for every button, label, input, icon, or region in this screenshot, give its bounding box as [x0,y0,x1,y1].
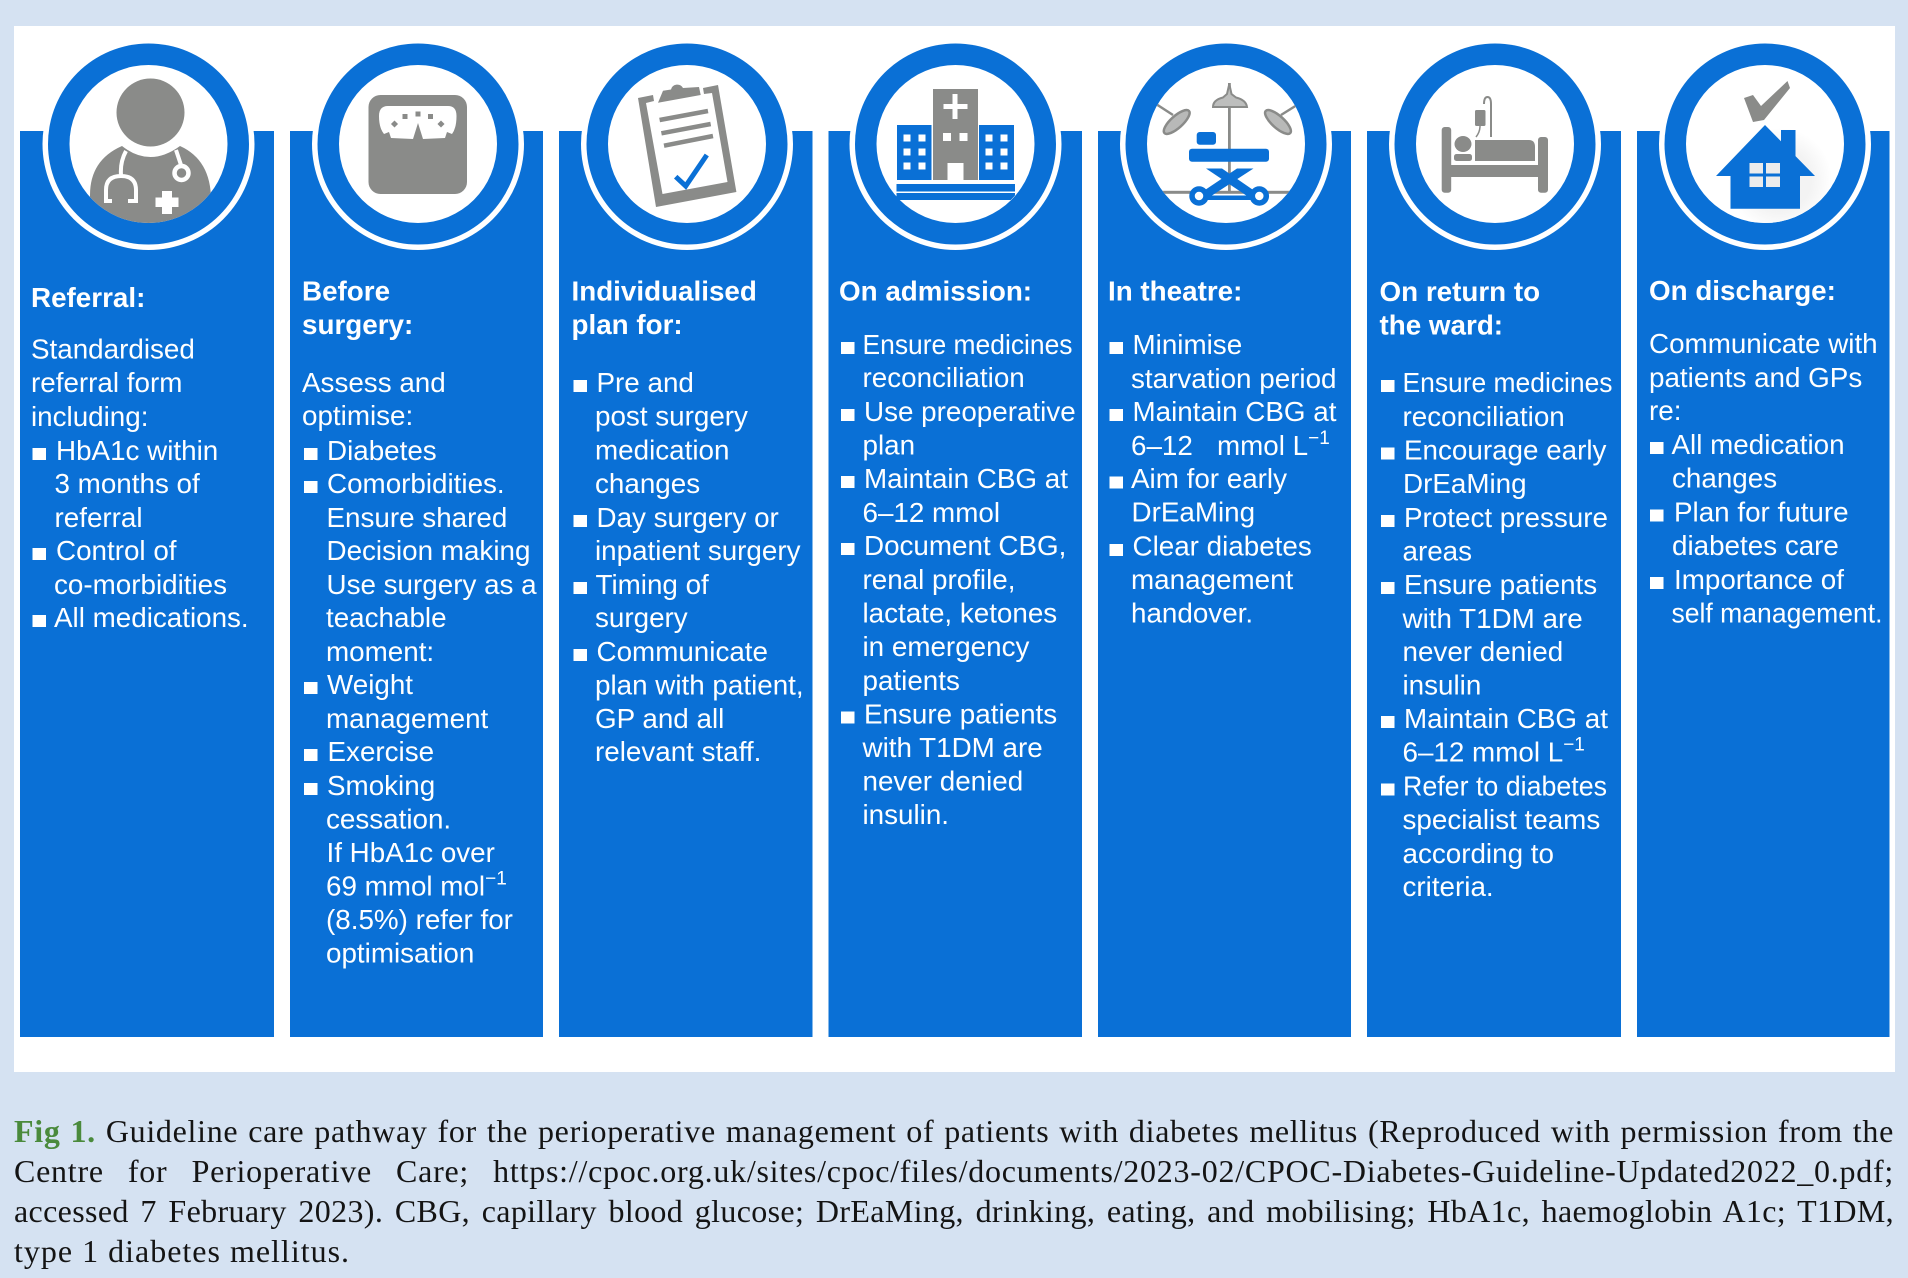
panel: referral [20,38,274,1037]
text block: Aim for early [1131,463,1287,494]
text block: 69 mmol mol [326,870,485,902]
text block: Ensure medicines [862,329,1072,360]
text block [302,367,537,968]
text block: −1 [1308,428,1330,449]
heading line 2: the ward: [1380,310,1503,340]
text block [841,329,1076,830]
text block: Importance of [1674,564,1844,595]
text block [31,334,249,633]
text block: Plan for future [1674,496,1849,528]
column background [1098,131,1351,1037]
panel: in theatre [1098,38,1351,1037]
text block: Encourage early [1404,434,1607,466]
text block: management [1131,564,1294,595]
text block: Weight [327,669,413,700]
text block: mmol L [1217,430,1308,461]
heading line 2: surgery: [302,309,413,340]
text block: plan [862,430,915,460]
panel: on admission [828,38,1082,1037]
text block: DrEaMing [1132,496,1255,528]
text block: changes [1672,462,1777,494]
text block: Exercise [328,736,434,767]
text block [1649,328,1882,628]
circle badge [42,38,254,250]
text block: with T1DM are [862,732,1043,763]
text block: patients [862,665,960,696]
heading: On return to [1380,276,1540,307]
icon: clipboard [638,85,736,207]
text block: Standardised [31,334,195,364]
text block: never denied [1402,636,1563,667]
text block: (8.5%) refer for [326,904,513,935]
text block: −1 [1563,734,1585,756]
text block: Communicate with [1649,328,1878,359]
text block: 3 months of [54,468,200,499]
caption [14,1113,1894,1269]
caption: accessed 7 February 2023). CBG, capillary blood glucose; DrEaMing, drinking, eating, and mobilising; HbA1c, haemoglobin A1c; T1DM, [14,1193,1894,1229]
column background [1367,131,1621,1037]
text block: 6–12 mmol L [1402,736,1563,768]
text block: GP and all [595,703,724,734]
circle badge [312,38,524,250]
text block: Timing of [596,569,709,600]
text block: Maintain CBG at [1404,703,1608,734]
text block: Pre and [596,367,694,398]
text block: Ensure patients [1404,569,1597,600]
caption: Fig 1. Guideline care pathway for the perioperative management of patients with diabetes mellitus (Reproduced with permission from the [14,1113,1894,1149]
text block: If HbA1c over [326,837,495,868]
icon: operating table [1150,83,1300,203]
text block: with T1DM are [1402,603,1583,634]
text block: never denied [862,766,1023,796]
icon: weighing scale [368,95,467,194]
text block: specialist teams [1402,804,1600,835]
text block: All medications. [54,602,249,633]
text block: Diabetes [327,435,437,466]
text block: referral form [31,367,182,398]
text block: Protect pressure [1404,502,1608,533]
circle badge [850,38,1062,250]
text block: Refer to diabetes [1403,770,1607,802]
text block: Ensure patients [864,698,1057,730]
text block: patients and GPs [1649,362,1862,393]
text block: Clear diabetes [1132,530,1312,562]
text block: reconciliation [862,362,1025,393]
text block: Comorbidities. [327,468,505,499]
text block: medication [595,434,729,466]
text block: relevant staff. [595,736,761,767]
text block: diabetes care [1672,530,1839,561]
text block: Use preoperative [864,396,1076,427]
text block: plan with patient, [595,670,804,700]
column background [290,131,543,1037]
text block: Day surgery or [596,502,779,533]
heading: In theatre: [1108,276,1242,306]
text block: surgery [595,602,688,633]
text block: Ensure medicines [1402,367,1612,398]
text block: self management. [1672,598,1882,628]
column background [1637,131,1890,1037]
text block: handover. [1131,598,1253,628]
text block: areas [1402,536,1472,566]
text block: HbA1c within [56,435,218,466]
text block: insulin [1402,670,1481,700]
text block: Maintain CBG at [1132,396,1337,427]
heading: Before [302,276,390,306]
heading: Referral: [31,282,145,313]
text block: moment: [326,636,434,667]
text block: 6–12 [1131,430,1193,461]
heading line 2: plan for: [572,309,683,340]
panel: on discharge [1637,38,1890,1037]
panel: before surgery [290,38,543,1037]
text block [1381,367,1612,902]
text block: optimisation [326,938,474,968]
column background [559,131,812,1037]
icon: hospital bed [1442,97,1548,193]
text block: management [326,703,489,734]
caption: type 1 diabetes mellitus. [14,1233,350,1269]
circle badge [581,38,793,250]
text block: Smoking [327,770,435,801]
circle badge [1659,38,1871,250]
icon: house with tick [1716,81,1832,232]
text block: −1 [485,868,507,890]
text block: renal profile, [862,564,1015,595]
text block: optimise: [302,400,413,431]
heading: On discharge: [1649,275,1836,306]
text block: co-morbidities [54,569,227,600]
text block: reconciliation [1402,401,1565,432]
text block: changes [595,468,700,499]
text block: starvation period [1131,363,1337,394]
text block: cessation. [326,804,451,834]
caption: Centre for Perioperative Care; https://cpoc.org.uk/sites/cpoc/files/documents/2023-02/CPOC-Diabetes-Guideline-Updated2022_0.pdf; [14,1153,1894,1189]
column background [20,131,274,1037]
circle badge [1389,38,1601,250]
text block: inpatient surgery [595,535,801,566]
text block: including: [31,401,148,432]
text block: 6–12 mmol [862,497,1000,528]
text block: DrEaMing [1403,468,1527,499]
text block: referral [54,502,143,533]
text block: Minimise [1132,329,1242,360]
text block: criteria. [1402,871,1494,902]
text block: Assess and [302,367,446,398]
text block: Decision making [326,535,530,566]
text block: Ensure shared [326,502,507,533]
text block: in emergency [862,631,1029,662]
icon: hospital [896,89,1015,200]
text block: Document CBG, [864,530,1066,561]
text block: teachable [326,602,447,633]
heading: Individualised [572,276,757,306]
text block: post surgery [595,400,748,432]
text block: lactate, ketones [862,598,1057,628]
column background [828,131,1082,1037]
text block: Communicate [596,636,768,667]
circle badge [1120,38,1332,250]
text block: Control of [56,535,177,566]
text block: re: [1649,395,1681,426]
text block [1110,329,1337,628]
text block: Use surgery as a [326,569,537,600]
text block: All medication [1672,429,1845,460]
text block: according to [1402,838,1554,869]
heading: On admission: [839,276,1032,306]
panel: return to ward [1367,38,1621,1037]
text block: insulin. [862,799,949,830]
text block [574,367,804,767]
icon: doctor [90,78,211,223]
panel: individualised plan [559,38,812,1037]
text block: Maintain CBG at [864,463,1068,494]
